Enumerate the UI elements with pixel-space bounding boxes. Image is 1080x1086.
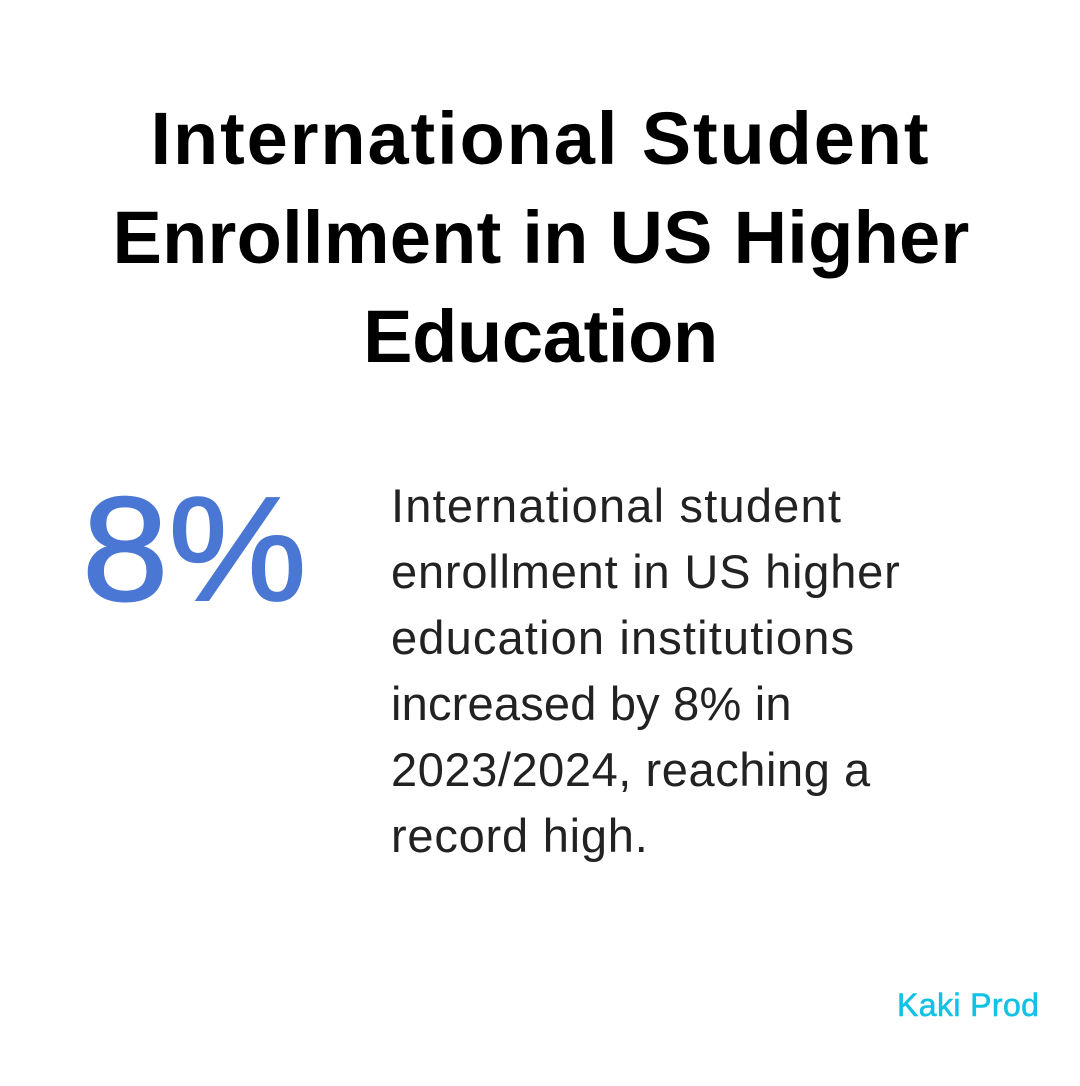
title: International Student bbox=[151, 97, 930, 180]
stat description: enrollment in US higher bbox=[391, 545, 901, 598]
title: Education bbox=[363, 295, 718, 378]
stat description: 2023/2024, reaching a bbox=[391, 743, 871, 796]
stat description: record high. bbox=[391, 809, 649, 862]
stat description: education institutions bbox=[391, 611, 855, 664]
title bbox=[112, 97, 970, 378]
stat description bbox=[391, 479, 901, 862]
big stat: 8%: 8% bbox=[82, 467, 307, 632]
logo: Kaki Prod: Kaki Prod bbox=[897, 987, 1039, 1023]
stat description: increased by 8% in bbox=[391, 677, 792, 730]
title: Enrollment in US Higher bbox=[112, 196, 970, 279]
stat description: International student bbox=[391, 479, 842, 532]
